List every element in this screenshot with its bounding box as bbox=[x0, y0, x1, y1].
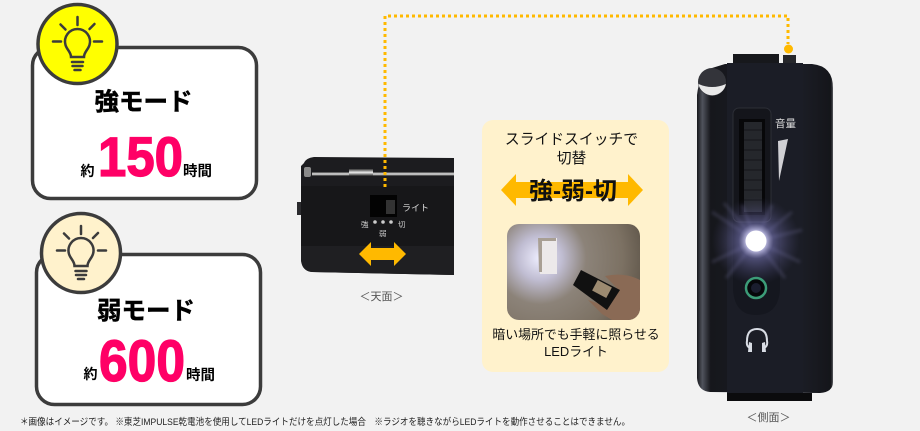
icon: bright yellow bulb bbox=[38, 4, 117, 84]
slide switch: 強 bbox=[361, 219, 369, 229]
heading: strong mode: 強モード bbox=[94, 88, 192, 116]
oval LED panel bbox=[733, 220, 780, 315]
text: about 150 hours: 約 bbox=[80, 163, 94, 179]
text: about 600 hours: 600 bbox=[99, 329, 185, 394]
panel: strong mode bbox=[32, 4, 256, 198]
slide switch: ライト bbox=[402, 203, 429, 213]
slide switch: 切 bbox=[398, 220, 406, 229]
caption: side view: ＜側面＞ bbox=[746, 411, 790, 424]
label: mode order: 強-弱-切 bbox=[529, 178, 617, 205]
heading: weak mode: 弱モード bbox=[97, 298, 195, 325]
footnote: ＊画像はイメージです。 ※東芝IMPULSE乾電池を使用してLEDライトだけを点灯した場合 ※ラジオを聴きながらLEDライトを動作させることはできません。 bbox=[20, 416, 630, 428]
device: side view bbox=[697, 54, 833, 401]
antenna bbox=[304, 167, 454, 177]
slide switch bbox=[361, 195, 429, 238]
text: about 150 hours: 時間 bbox=[183, 163, 212, 180]
jack bbox=[746, 278, 766, 298]
text: about 600 hours: 時間 bbox=[186, 367, 215, 384]
photo: LED light in the dark bbox=[507, 224, 640, 320]
caption: LED usage bbox=[492, 327, 660, 359]
heading: slide switch: 切替 bbox=[557, 150, 586, 167]
antenna knob bbox=[698, 68, 726, 96]
device: top view bbox=[297, 157, 454, 275]
text: about 150 hours: 150 bbox=[98, 125, 183, 188]
panel: weak mode bbox=[36, 214, 260, 404]
caption: LED usage: LEDライト bbox=[544, 344, 608, 359]
icon: headphones bbox=[747, 329, 767, 352]
arrow: mode order bbox=[501, 174, 643, 206]
label: volume: 音量 bbox=[775, 117, 796, 130]
caption: top view: ＜天面＞ bbox=[360, 291, 404, 303]
arrow: switch direction bbox=[359, 242, 406, 266]
caption: LED usage: 暗い場所でも手軽に照らせる bbox=[492, 327, 660, 342]
icon: volume wedge bbox=[778, 139, 788, 181]
heading: slide switch bbox=[505, 132, 638, 167]
text: about 600 hours: 約 bbox=[84, 366, 98, 382]
dotted connector line bbox=[385, 16, 788, 187]
connector end dot bbox=[784, 44, 793, 54]
heading: slide switch: スライドスイッチで bbox=[505, 132, 638, 148]
slide switch: 弱 bbox=[379, 229, 386, 238]
LED light glow bbox=[712, 197, 802, 285]
panel: slide switch explanation bbox=[482, 120, 669, 372]
volume dial bbox=[733, 108, 771, 222]
icon: soft cream bulb bbox=[42, 214, 120, 292]
